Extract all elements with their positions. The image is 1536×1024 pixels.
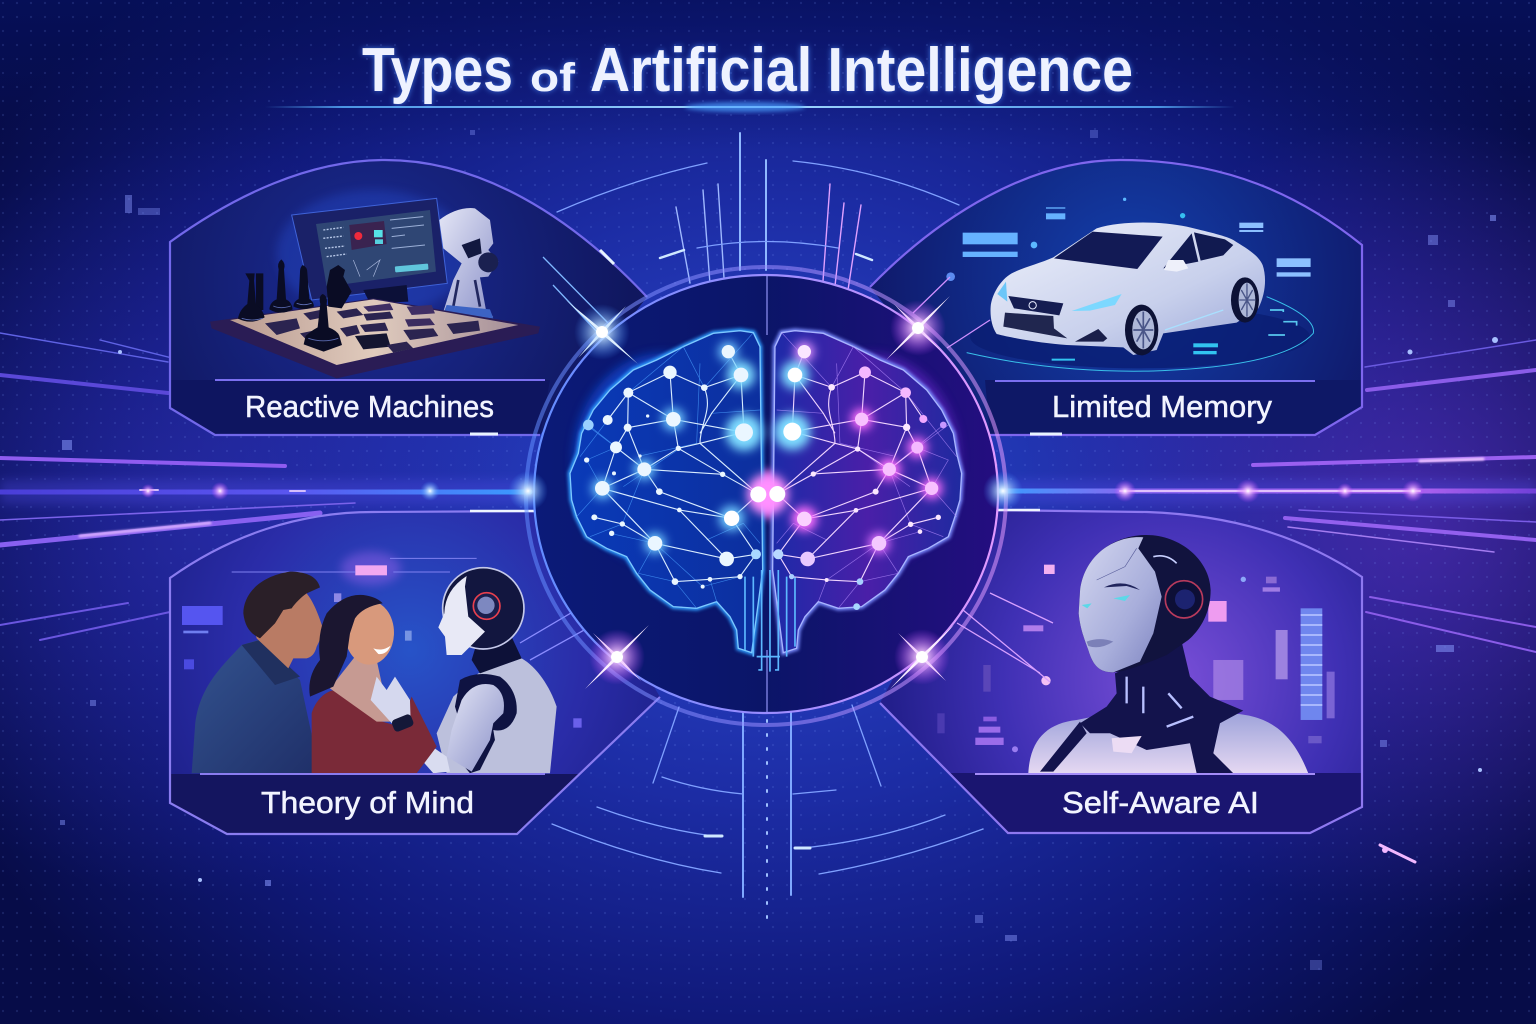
divider: [975, 773, 1315, 775]
shoulders: [1028, 713, 1308, 773]
illustration: humanoid robot: [937, 535, 1335, 773]
title: Types: [362, 36, 513, 105]
illustration: chess board and robot arm: [210, 190, 540, 378]
left hemisphere: [570, 331, 763, 653]
front wheel: [1125, 305, 1158, 355]
board: [210, 298, 540, 378]
panel: theory of mind: [170, 511, 660, 834]
panel outline: [170, 511, 660, 834]
car body: [991, 222, 1265, 355]
label bar: [950, 773, 1362, 833]
panel shape: [870, 160, 1362, 435]
panel: limited memory: [870, 160, 1362, 435]
edge glints: [470, 510, 550, 512]
divider: [200, 773, 545, 775]
brain stem: [745, 570, 795, 672]
neurons left: [583, 345, 766, 589]
panel shape: [170, 511, 660, 834]
checks: [265, 303, 480, 353]
floating particles: [60, 130, 1498, 970]
brain: [570, 331, 962, 672]
panel: reactive machines: [170, 160, 647, 435]
fog lamp: [1075, 329, 1107, 342]
edge glints: [983, 509, 1040, 511]
illustration: people and robot: [182, 552, 582, 773]
title: Artificial Intelligence: [590, 36, 1133, 105]
label: Limited Memory: [1052, 389, 1272, 424]
neck and armour: [1080, 642, 1243, 773]
outline glow: [570, 331, 962, 653]
mesh: [577, 333, 760, 608]
top beams: [740, 133, 766, 270]
panel outline: [880, 510, 1362, 833]
light rays and streaks: [0, 133, 1536, 920]
panel shape: [880, 510, 1362, 833]
windshield: [1054, 232, 1163, 269]
holographic data: [937, 565, 1335, 752]
label bar: [170, 774, 580, 834]
floor ring: [967, 297, 1313, 371]
edge glints: [470, 250, 614, 434]
ring sparkles: [508, 296, 1023, 689]
right hemisphere: [773, 331, 962, 653]
grille: [1008, 296, 1063, 315]
chess pieces: [238, 259, 352, 352]
illustration: car with data overlays: [946, 198, 1313, 371]
head: [1079, 535, 1211, 672]
label bar: [985, 380, 1362, 435]
glow: [573, 353, 960, 567]
panel outline: [870, 160, 1362, 435]
neuron glows: [592, 342, 942, 554]
rear wheel: [1231, 277, 1259, 323]
panel outline: [170, 160, 647, 435]
panel shape: [170, 160, 647, 435]
label: Theory of Mind: [261, 785, 474, 820]
side windows: [1163, 232, 1233, 268]
title: of: [530, 56, 576, 100]
bottom beams: [743, 650, 791, 897]
label bar: [170, 380, 550, 435]
woman: [309, 595, 437, 773]
edge glints: [1030, 432, 1062, 436]
robot arm: [439, 208, 498, 318]
connections: [594, 352, 758, 582]
streak glints: [141, 479, 1424, 503]
floor disc: [970, 305, 1310, 368]
data bars: [946, 198, 1311, 281]
man: [192, 572, 324, 773]
monitor: [292, 198, 447, 303]
panel: self-aware AI: [880, 510, 1362, 833]
central ring: [526, 267, 1006, 725]
divider: [995, 380, 1315, 382]
neurons right: [769, 345, 947, 610]
title: [362, 36, 1133, 105]
lower intake: [1003, 313, 1067, 338]
connector rays: [520, 257, 1053, 682]
face: [1079, 537, 1162, 672]
label: Self-Aware AI: [1062, 785, 1259, 820]
mirror: [1164, 260, 1188, 272]
label: Reactive Machines: [245, 389, 494, 424]
robot: [397, 568, 557, 773]
holographic data: [182, 552, 582, 728]
title underline: [265, 102, 1235, 112]
headlight: [1072, 294, 1122, 311]
divider: [215, 379, 545, 381]
headphone: [1165, 581, 1203, 618]
